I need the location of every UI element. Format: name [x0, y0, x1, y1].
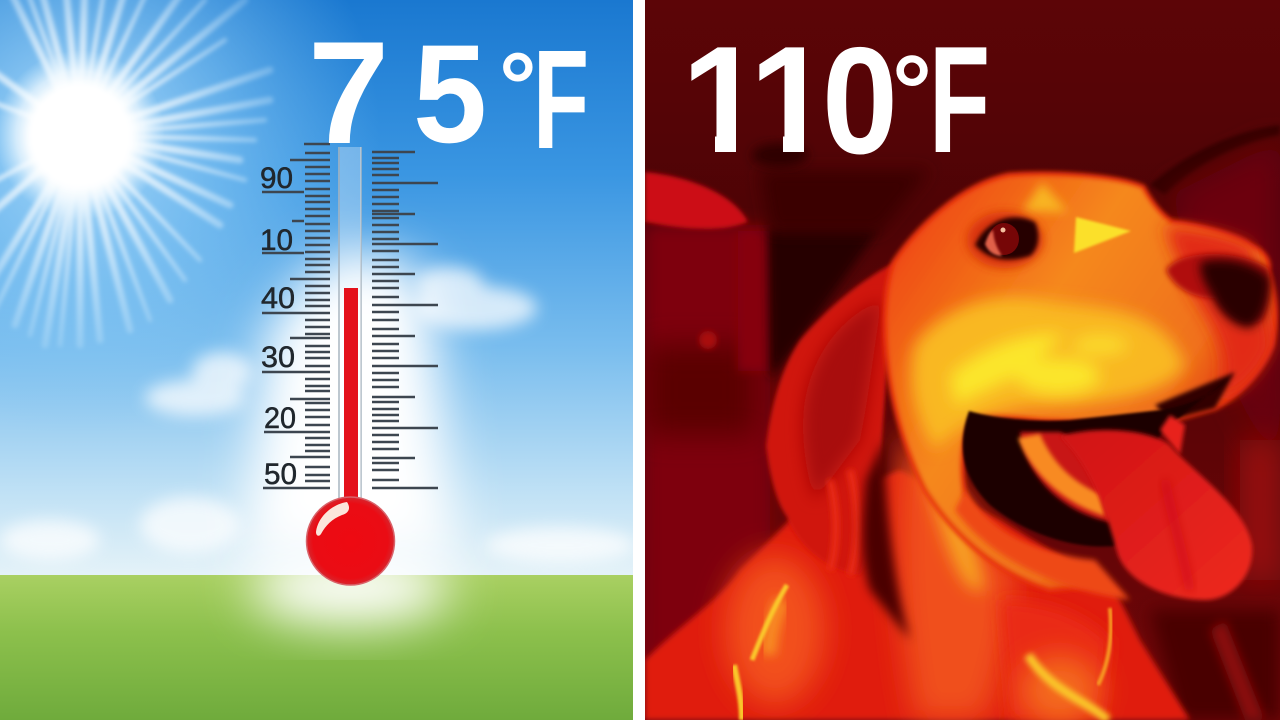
scale ticks right	[372, 152, 438, 488]
forehead highlight	[1074, 217, 1131, 253]
bulb highlight	[316, 502, 349, 536]
heading: 110°F: F	[929, 15, 990, 185]
white glow behind thermometer	[245, 252, 455, 560]
eye	[967, 212, 1043, 268]
shoulder glow	[725, 555, 825, 705]
cheek interior red	[1160, 415, 1185, 455]
dark red car interior	[645, 0, 1280, 720]
neck bright band	[917, 483, 993, 598]
heading: 75°F: 5	[413, 15, 487, 172]
tongue	[1060, 430, 1252, 600]
dog chest and body	[645, 470, 1190, 720]
scale numbers: 20	[264, 402, 296, 435]
lower jaw and lip edge	[1155, 372, 1235, 420]
icon: sun with rays	[0, 0, 270, 345]
heading: 110°F: 1	[749, 15, 834, 185]
sky background	[0, 0, 633, 580]
tube	[339, 147, 361, 505]
red mercury column	[344, 288, 358, 513]
scale ticks left	[262, 144, 330, 488]
glowing chest streaks	[734, 585, 1111, 720]
dog illustration	[645, 174, 1275, 720]
head	[885, 174, 1275, 590]
scale numbers: 40	[261, 282, 295, 315]
heading: 110°F: 1	[681, 15, 766, 185]
neck glow	[898, 430, 1013, 720]
scale numbers	[260, 162, 297, 491]
heading: 110°F: 0	[822, 16, 898, 186]
heading: 75°F: F	[533, 20, 589, 178]
scale numbers: 30	[261, 341, 295, 374]
scale numbers: 50	[264, 458, 297, 491]
muzzle red shading	[1165, 225, 1272, 400]
mouth open	[963, 378, 1228, 547]
grass field	[0, 575, 633, 720]
bulb	[306, 497, 394, 585]
clouds	[0, 267, 635, 563]
gums and inner mouth	[1020, 432, 1115, 522]
heading: 110°F	[681, 15, 990, 186]
scale numbers: 90	[260, 162, 293, 195]
panel: 75°F sunny day	[0, 0, 635, 720]
bright yellow highlights	[950, 334, 1128, 405]
car interior shapes	[645, 125, 1280, 720]
dark gap between ear and neck	[863, 440, 910, 640]
yellow cheek highlight	[911, 297, 1185, 450]
ear	[766, 262, 896, 575]
heading: 110°F: °	[892, 35, 932, 147]
scale numbers: 10	[260, 224, 293, 257]
panel: 110°F hot car dog	[645, 0, 1280, 720]
nose	[1166, 254, 1270, 328]
heading: 75°F: °	[499, 33, 537, 138]
teeth	[1018, 434, 1105, 516]
heading: 75°F	[314, 42, 586, 148]
icon: thermometer	[260, 144, 438, 585]
lower jaw	[955, 490, 1130, 600]
glow on horizon	[250, 552, 450, 624]
heading: 75°F: 7	[308, 11, 389, 174]
